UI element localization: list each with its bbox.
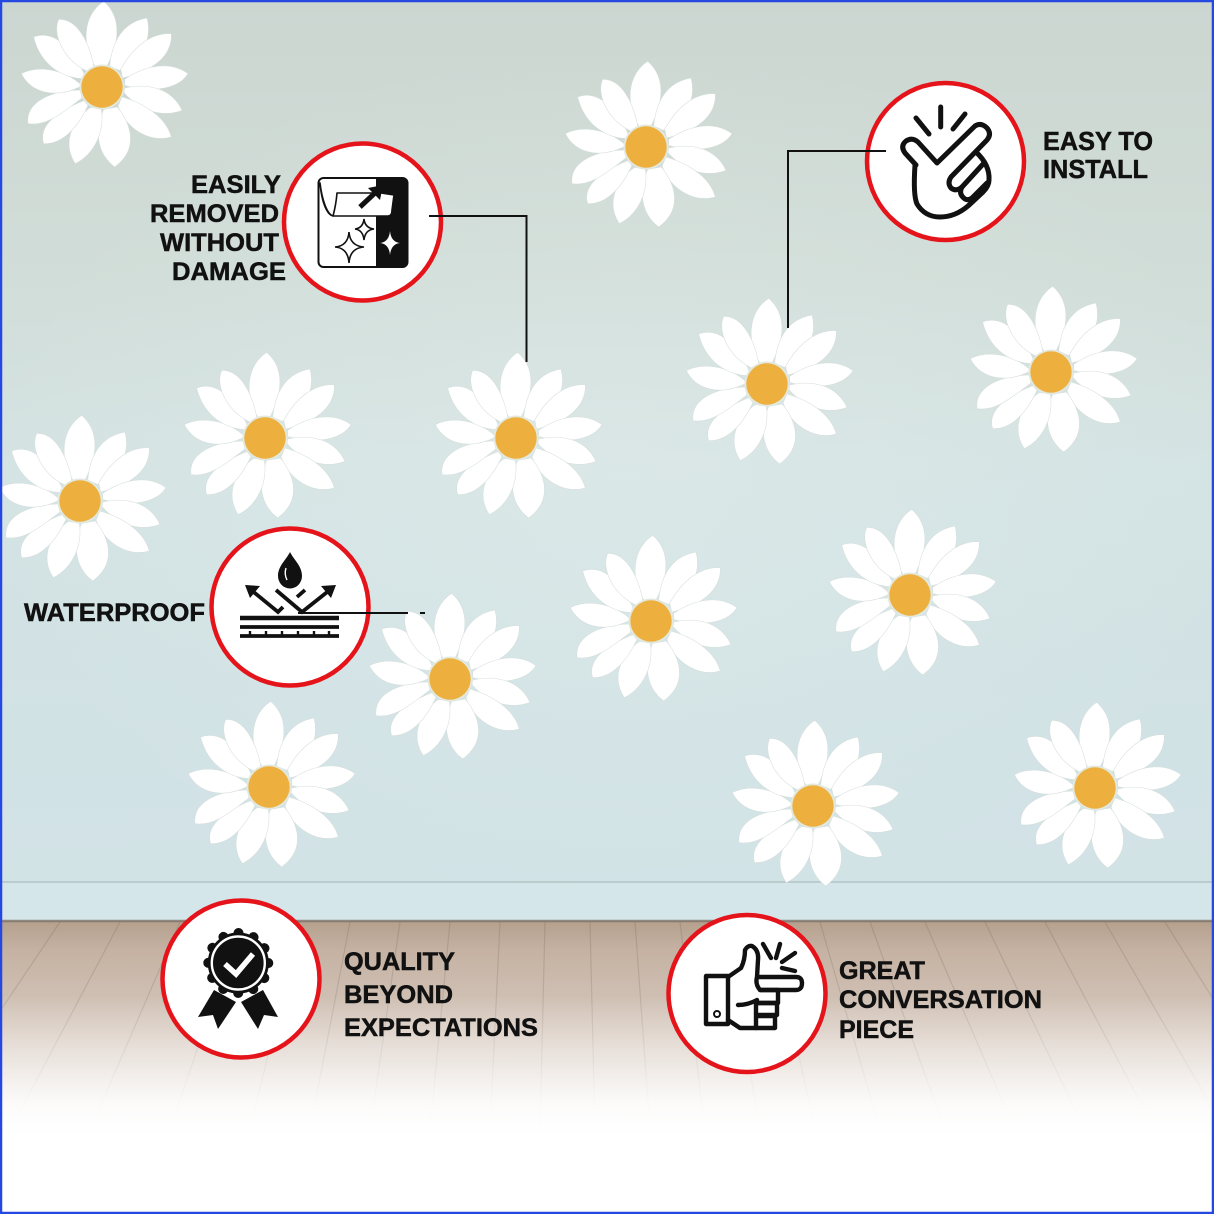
daisy flower 2 — [565, 61, 732, 227]
callout: easy to install — [788, 83, 1153, 328]
label: easy to install — [1043, 126, 1153, 184]
badge circle — [668, 915, 826, 1072]
daisy flower 10 — [369, 593, 536, 759]
label: quality beyond expectations: BEYOND — [344, 981, 453, 1009]
label: quality beyond expectations: QUALITY — [344, 948, 455, 976]
connector line — [788, 151, 886, 328]
label: quality beyond expectations: EXPECTATIONS — [344, 1014, 538, 1042]
label: easy to install: EASY TO — [1043, 126, 1153, 156]
label: easily removed — [150, 171, 286, 286]
icon: finger snap hand — [903, 107, 990, 217]
label: great conversation piece: PIECE — [839, 1016, 914, 1044]
label: great conversation piece: GREAT — [839, 957, 925, 985]
badge circle — [162, 900, 320, 1058]
label: quality beyond expectations — [344, 948, 538, 1042]
label: easily removed: EASILY — [191, 171, 281, 199]
label: great conversation piece: CONVERSATION — [839, 986, 1042, 1014]
connector line — [298, 612, 425, 614]
callout: easily removed without damage — [150, 144, 526, 362]
daisy flower 3 — [970, 286, 1137, 452]
background: wall — [0, 0, 1214, 922]
badge circle — [212, 528, 368, 686]
daisy flower 7 — [0, 415, 166, 581]
daisy flower 11 — [188, 701, 355, 867]
daisy flower 13 — [1014, 702, 1181, 868]
background: wooden floor — [0, 921, 1214, 1214]
callout: quality beyond expectations — [162, 900, 538, 1058]
daisy flower 12 — [732, 720, 899, 886]
label: easy to install: INSTALL — [1043, 154, 1148, 184]
icon: peeling sticker with sparkles — [318, 178, 408, 267]
label: easily removed: DAMAGE — [172, 258, 286, 286]
icon: water drop repelled from layers — [240, 552, 339, 636]
label: easily removed: REMOVED — [150, 200, 279, 228]
callout: great conversation piece — [668, 915, 1042, 1072]
daisy flower 5 — [435, 352, 602, 518]
callout: waterproof — [24, 528, 425, 686]
icon: rosette with check mark — [198, 931, 278, 1029]
daisy flower 1 — [21, 1, 188, 167]
label: easily removed: WITHOUT — [160, 229, 279, 257]
label: waterproof: WATERPROOF — [24, 599, 205, 627]
badge circle — [867, 83, 1024, 240]
daisy flower 8 — [570, 535, 737, 701]
daisy flower 6 — [184, 352, 351, 518]
label: great conversation piece — [839, 957, 1042, 1044]
daisy flower 4 — [686, 298, 853, 464]
daisy flower 9 — [829, 509, 996, 675]
icon: hand snapping fingers — [706, 944, 802, 1028]
badge circle — [284, 144, 441, 300]
connector line — [429, 216, 526, 362]
